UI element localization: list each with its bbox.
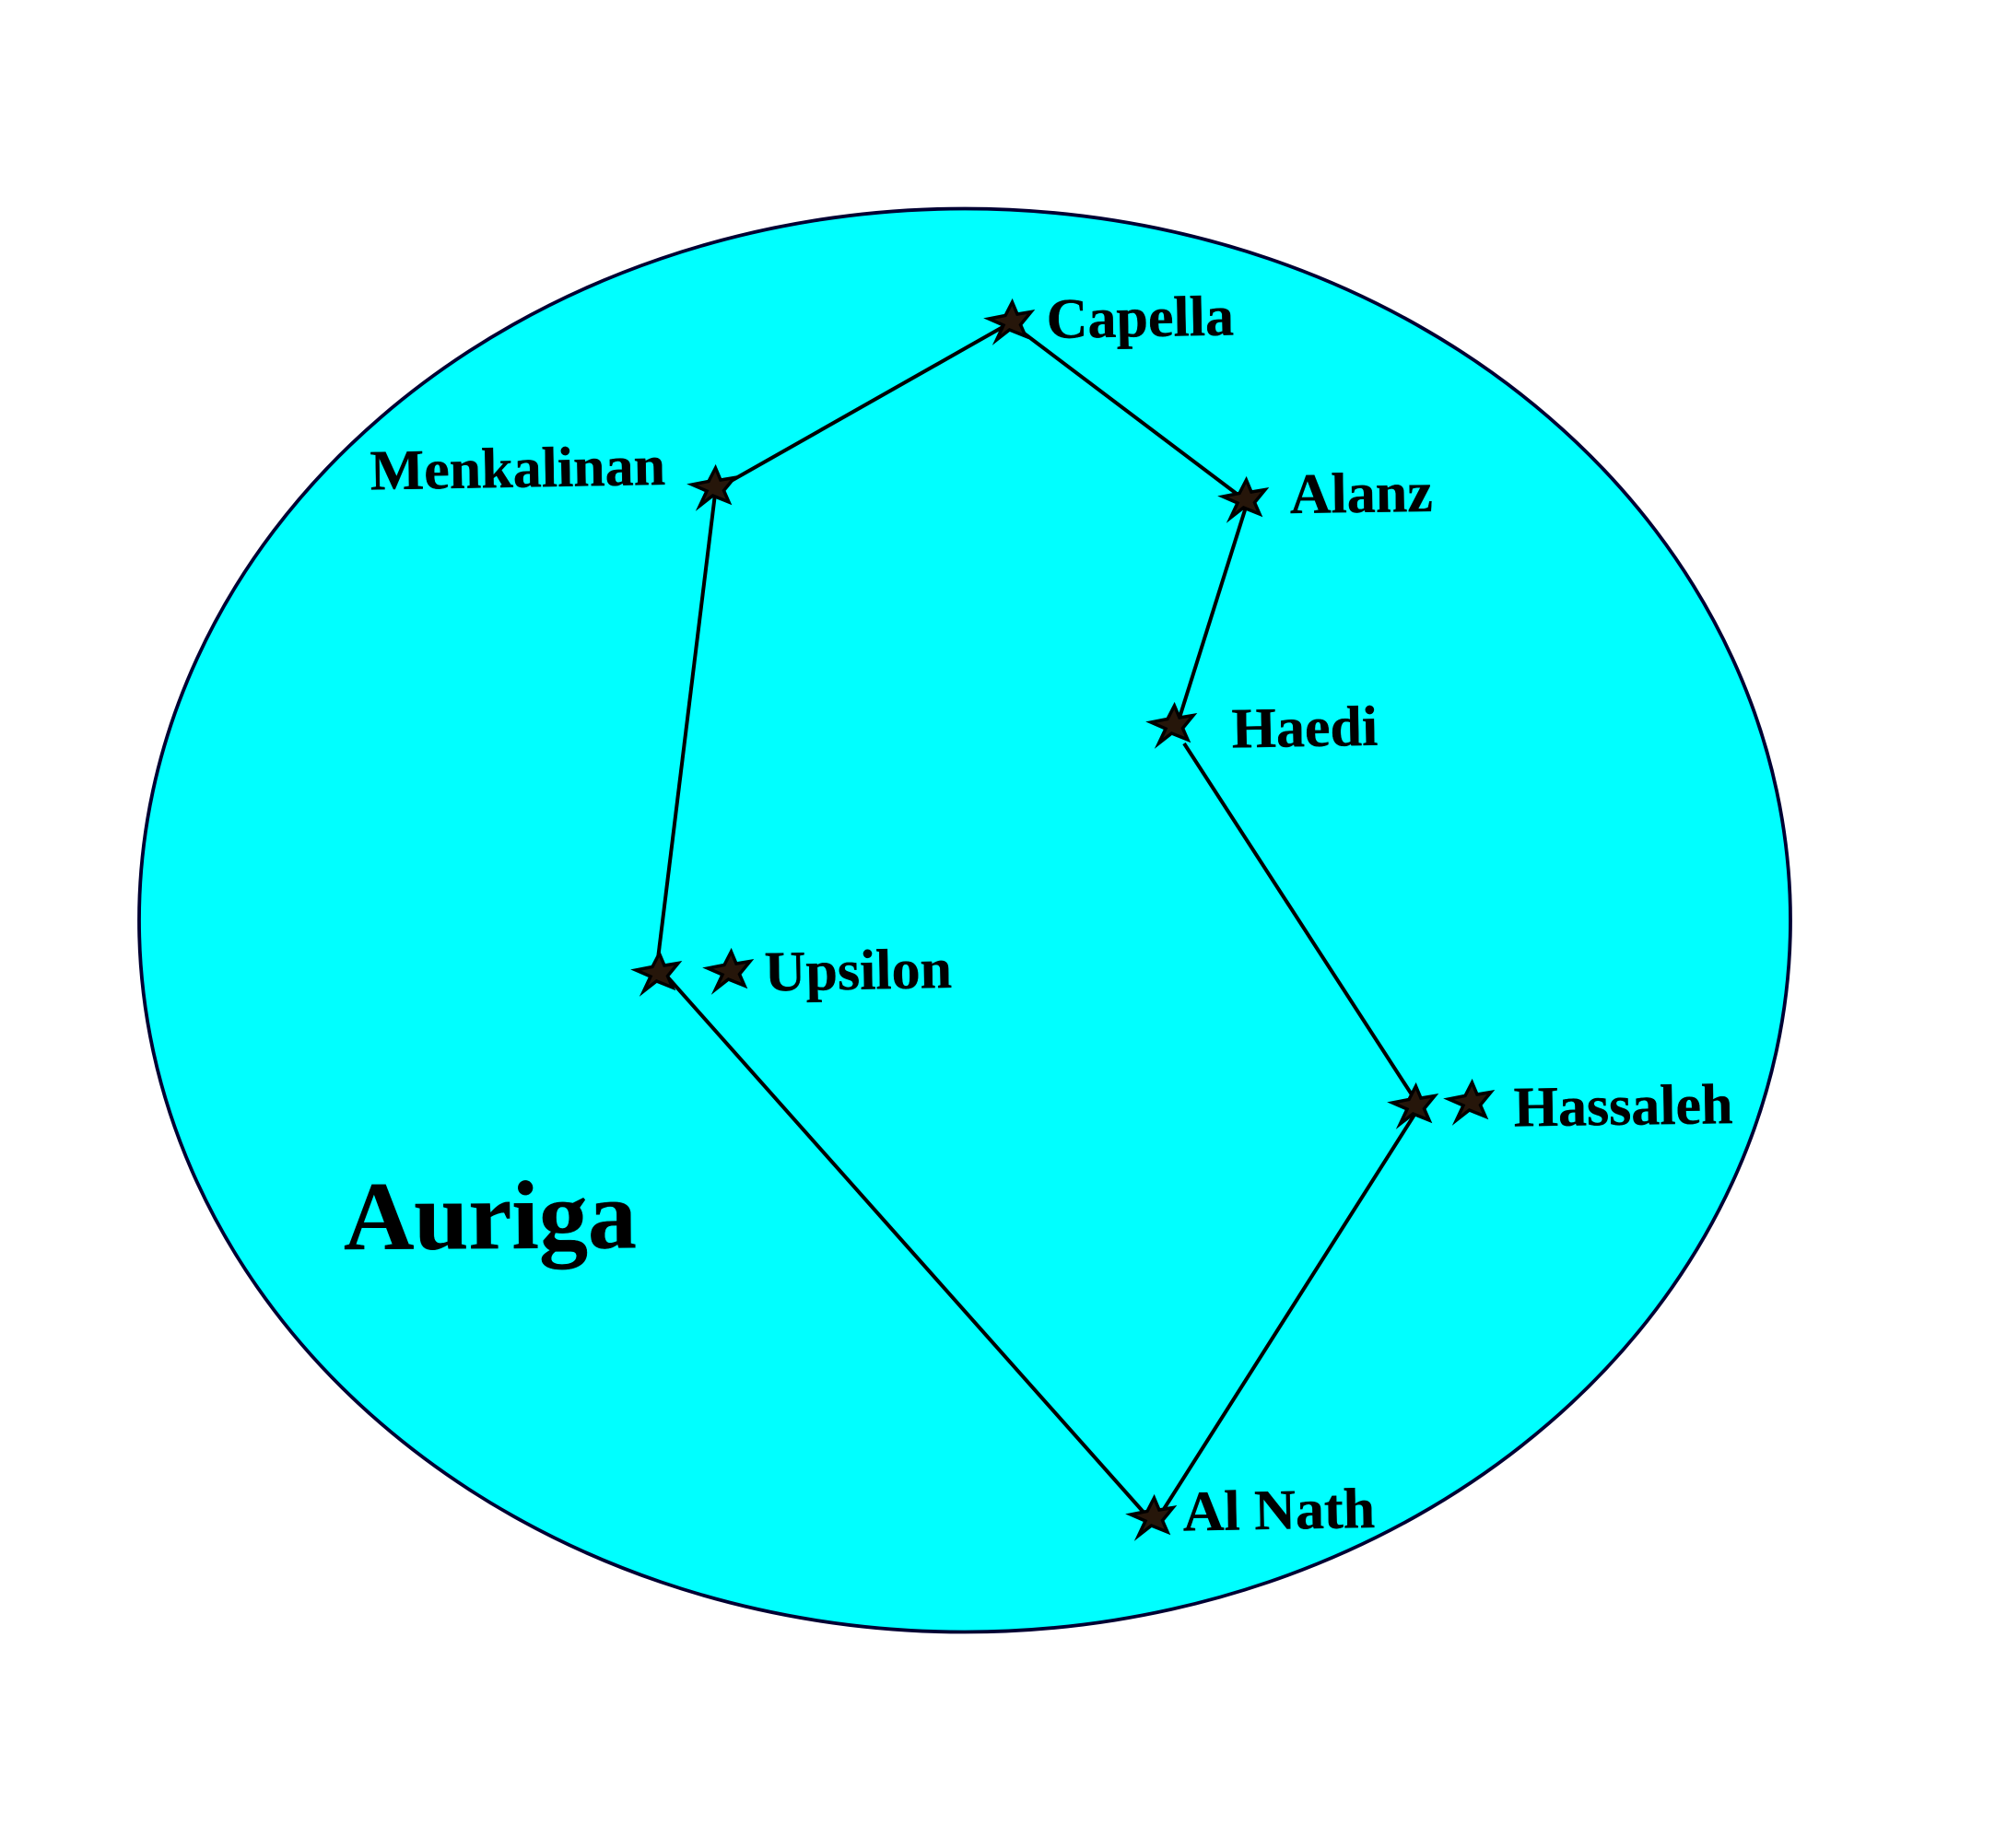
icon: star Al Nath <box>1131 1498 1173 1536</box>
icon: star Upsilon 1 <box>636 953 678 991</box>
label: Hassaleh: Hassaleh <box>1513 1073 1733 1139</box>
icon: star Upsilon 2 <box>708 952 750 989</box>
icon: star Hassaleh 1 <box>1392 1086 1435 1124</box>
label: Alanz: Alanz <box>1289 462 1433 526</box>
label: Menkalinan: Menkalinan <box>370 435 666 502</box>
icon: star Hassaleh 2 <box>1449 1082 1491 1120</box>
icon: star Menkalinan <box>692 468 734 506</box>
label: Haedi: Haedi <box>1231 696 1379 760</box>
icon: star Capella <box>989 302 1031 340</box>
label: Upsilon: Upsilon <box>764 938 953 1003</box>
icon: star Alanz <box>1223 480 1265 518</box>
title: Auriga <box>344 1161 637 1270</box>
label: Capella: Capella <box>1046 285 1234 351</box>
label: Al Nath: Al Nath <box>1182 1478 1376 1543</box>
constellation lines <box>656 322 1421 1516</box>
icon: star Haedi <box>1151 706 1193 743</box>
panel: cyan sky ellipse <box>139 208 1790 1632</box>
